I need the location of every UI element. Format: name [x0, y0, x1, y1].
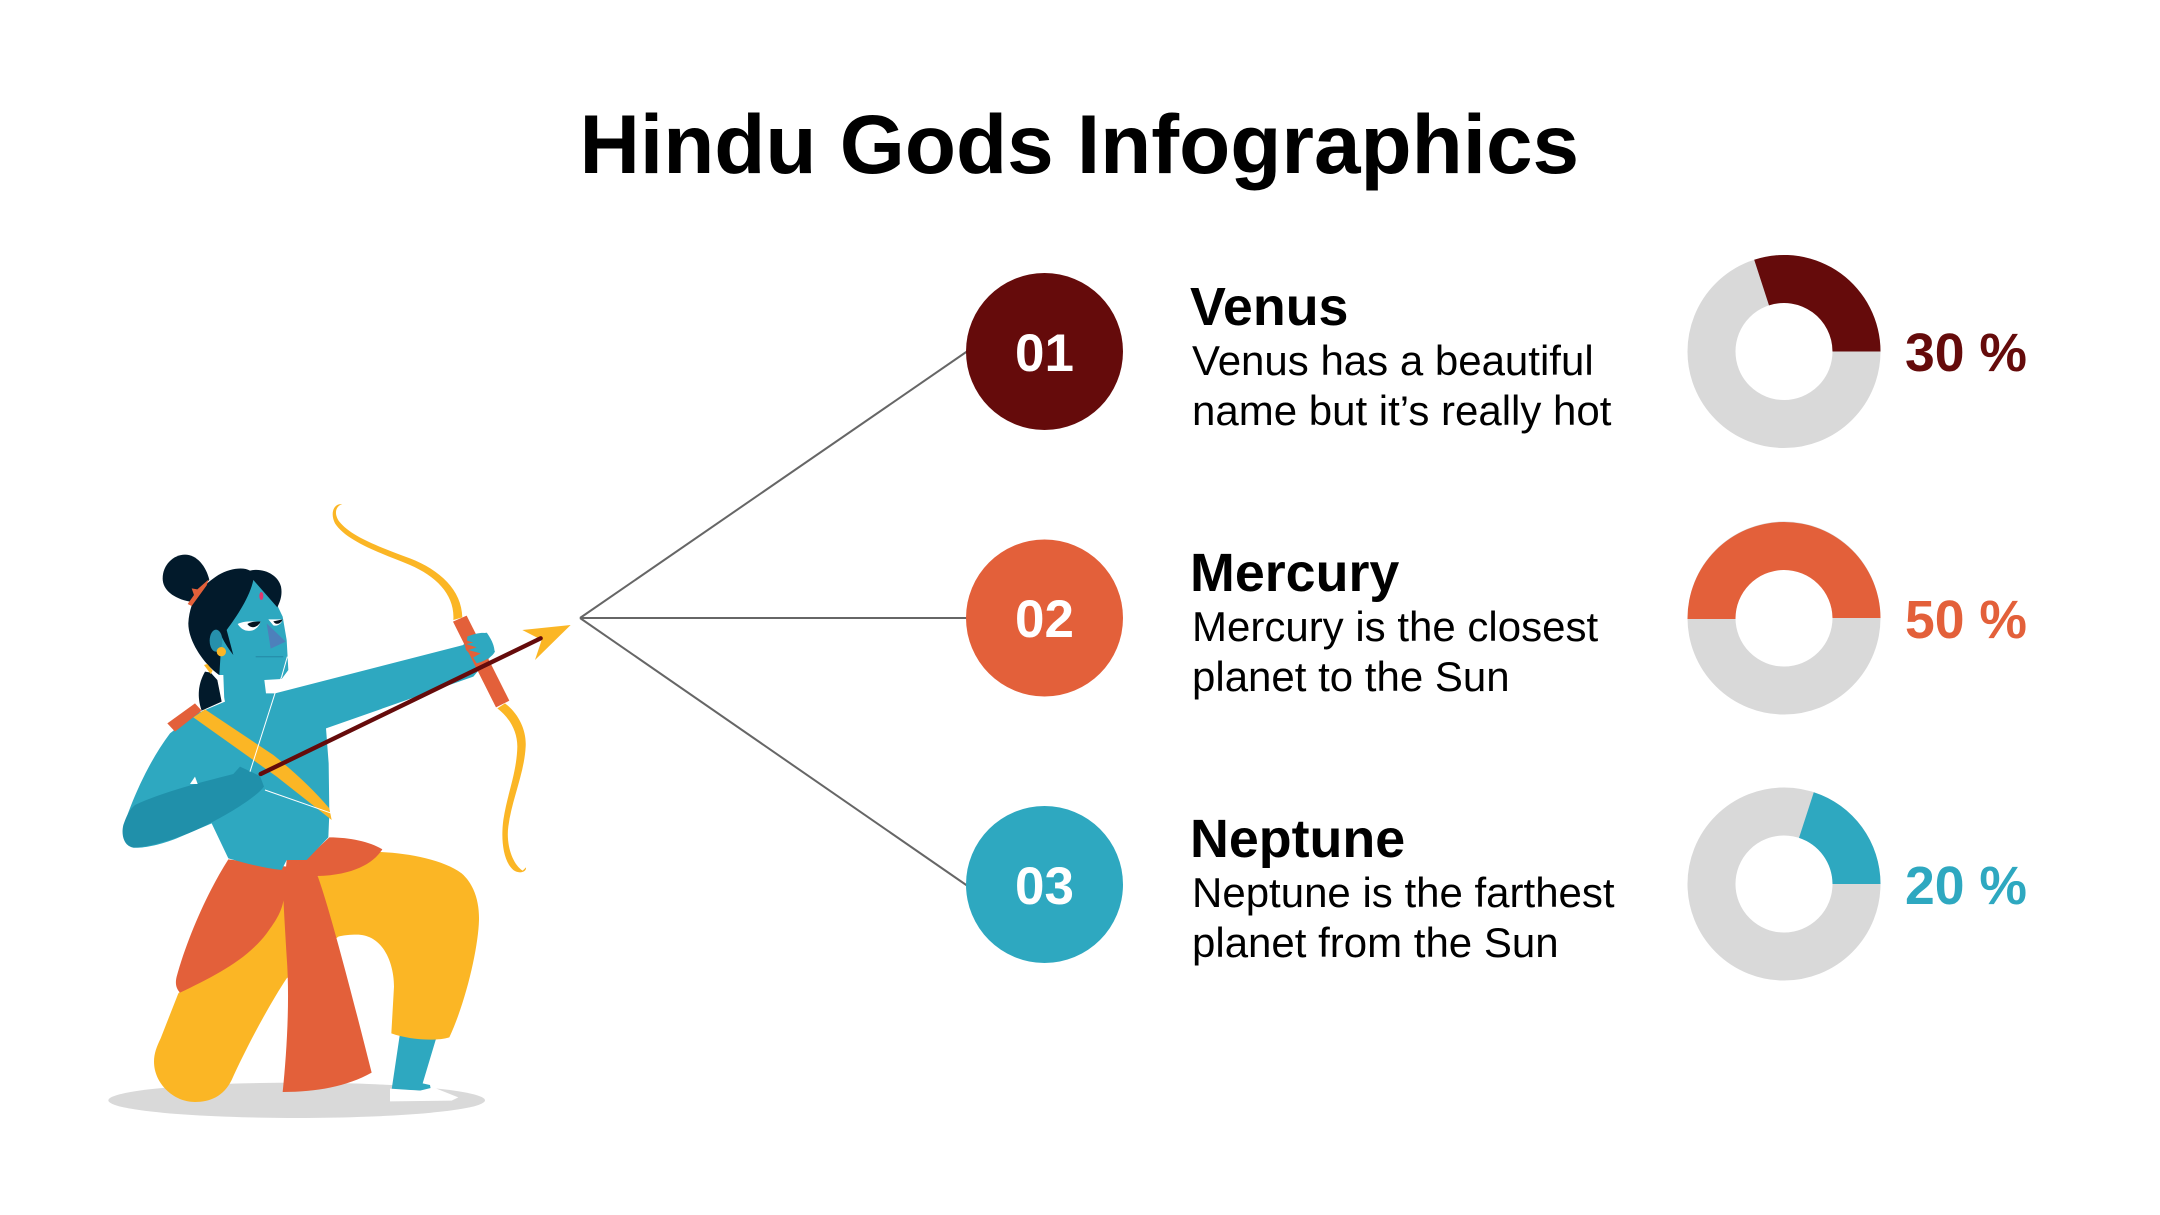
Mercury heading: Mercury: [1190, 543, 1399, 603]
item 3: Neptune: [966, 792, 2027, 966]
hair tie: [188, 579, 209, 606]
torso and back arm: [123, 580, 495, 870]
item 2: Mercury: [966, 522, 2027, 700]
golden bow: [333, 504, 526, 872]
number badge 01: [966, 273, 1123, 430]
value 50%: 50 %: [1905, 591, 2027, 650]
item 1: Venus: [966, 255, 2027, 434]
number badge 01: 01: [1015, 324, 1074, 383]
illustration: Hindu god archer: [108, 504, 571, 1118]
Neptune description: Neptune is the farthest: [1192, 869, 1615, 916]
yellow chest sash: [193, 709, 332, 820]
number badge 03: 03: [1015, 857, 1074, 916]
dark front forearm: [123, 767, 264, 848]
Mercury description: Mercury is the closest: [1192, 603, 1598, 650]
value 30%: 30 %: [1905, 324, 2027, 383]
donut chart 20%: [1712, 792, 1880, 956]
number badge 02: 02: [1015, 590, 1074, 649]
number badge 03: [966, 806, 1123, 963]
bow string: [250, 657, 332, 813]
arrow shaft: [261, 638, 541, 774]
number badge 02: [966, 540, 1123, 696]
value 20%: 20 %: [1905, 857, 2027, 916]
orange shoulder strap: [167, 703, 202, 732]
Mercury description: planet to the Sun: [1192, 653, 1510, 700]
Venus description: Venus has a beautiful: [1192, 337, 1594, 384]
Neptune heading: Neptune: [1190, 809, 1405, 869]
connector lines from arrow tip to the three items: [580, 348, 972, 889]
Neptune description: planet from the Sun: [1192, 919, 1559, 966]
donut chart 50%: [1687, 522, 1880, 690]
orange waist sash: [176, 837, 382, 1092]
Venus description: name but it’s really hot: [1192, 387, 1612, 434]
yellow trousers: [154, 852, 479, 1102]
title: Hindu Gods Infographics: [580, 97, 1579, 191]
rear foot and shoe: [390, 1033, 458, 1101]
hand gripping bow: [463, 633, 494, 663]
arrowhead: [522, 625, 571, 660]
dark hair and bun: [163, 555, 282, 711]
donut chart 30%: [1712, 255, 1880, 424]
ear: [210, 630, 222, 652]
earring and necklace: [204, 647, 226, 674]
Venus heading: Venus: [1190, 277, 1348, 337]
face details: [238, 592, 286, 657]
neck highlight: [218, 675, 224, 703]
white arm gap: [190, 777, 198, 784]
bow grip: [453, 616, 509, 707]
ground shadow: [108, 1083, 485, 1118]
